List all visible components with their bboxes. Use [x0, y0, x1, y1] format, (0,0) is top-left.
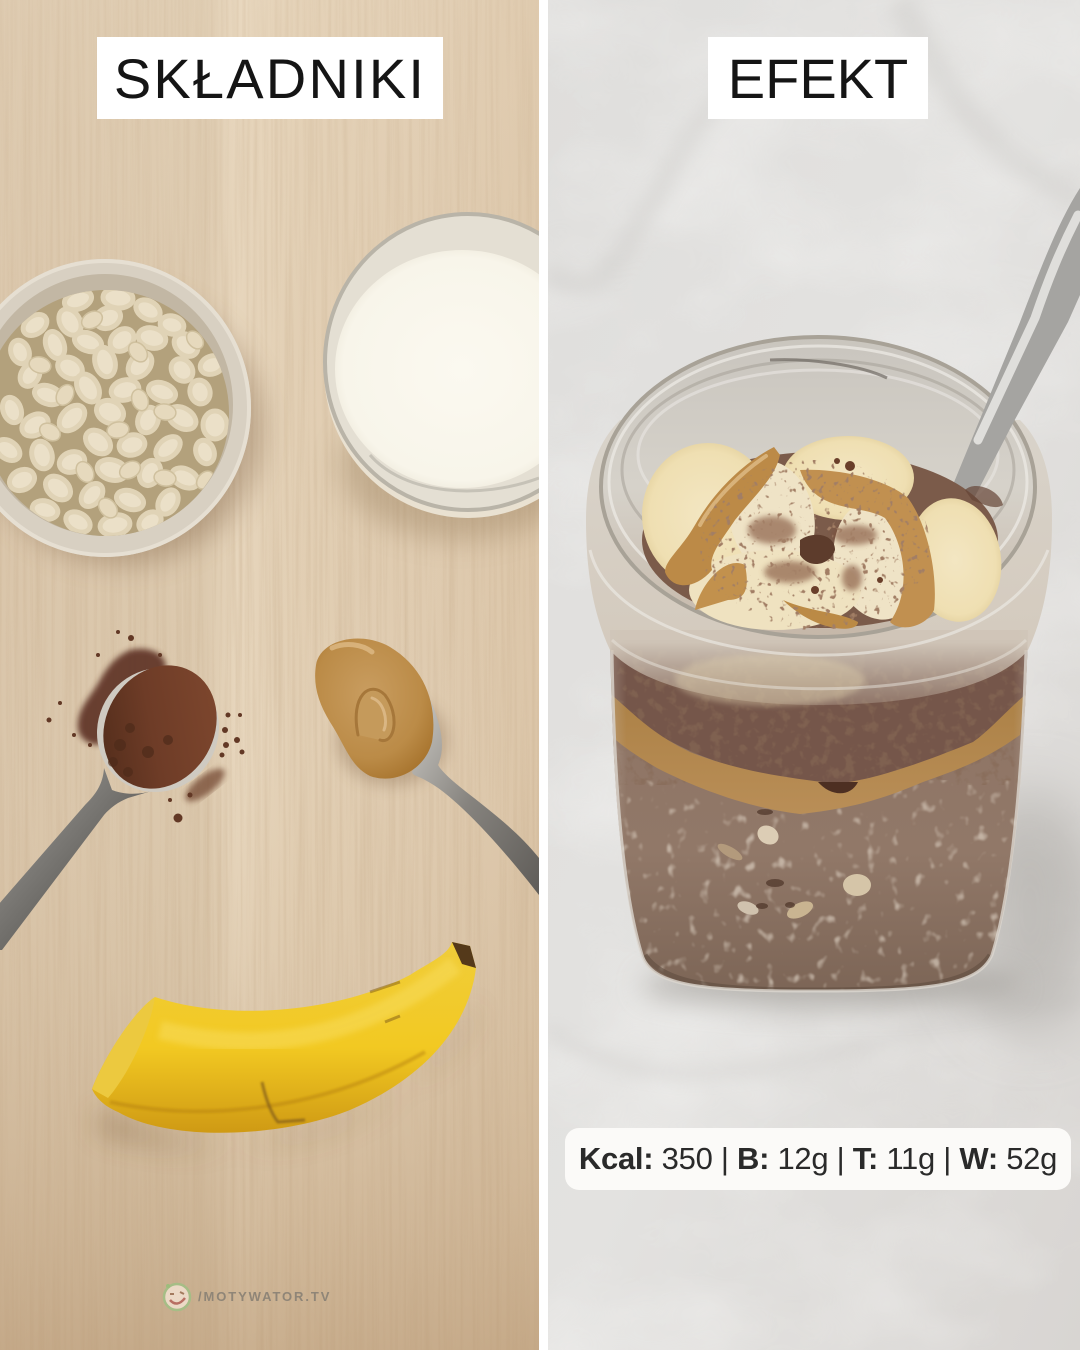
heading: składniki: SKŁADNIKI — [114, 47, 426, 110]
icon: spoon with cocoa powder — [0, 630, 244, 950]
callout: nutrition values: Kcal: 350 | B: 12g | T: 11g | W: 52g — [579, 1141, 1057, 1176]
chart: porridge layers — [610, 643, 1028, 991]
panel: ingredients on wood — [0, 0, 539, 1350]
text: watermark: /MOTYWATOR.TV — [198, 1289, 331, 1304]
icon: bowl of oats — [0, 259, 262, 564]
rim highlights — [590, 337, 1048, 689]
heading: składniki — [97, 37, 443, 119]
panel: finished jar on marble — [548, 0, 1080, 1350]
icon: banana slices with peanut butter and cocoa — [642, 436, 1009, 630]
heading: efekt — [708, 37, 928, 119]
neck of the jar — [586, 420, 1052, 705]
icon: spoon with peanut butter — [315, 639, 539, 895]
icon: banana — [92, 942, 478, 1145]
icon: spoon in jar — [950, 188, 1080, 506]
icon: glass jar — [586, 188, 1080, 1000]
icon: watermark logo — [162, 1282, 192, 1312]
callout: nutrition values — [565, 1128, 1071, 1190]
icon: glass of milk — [323, 212, 539, 548]
heading: efekt: EFEKT — [728, 47, 908, 110]
